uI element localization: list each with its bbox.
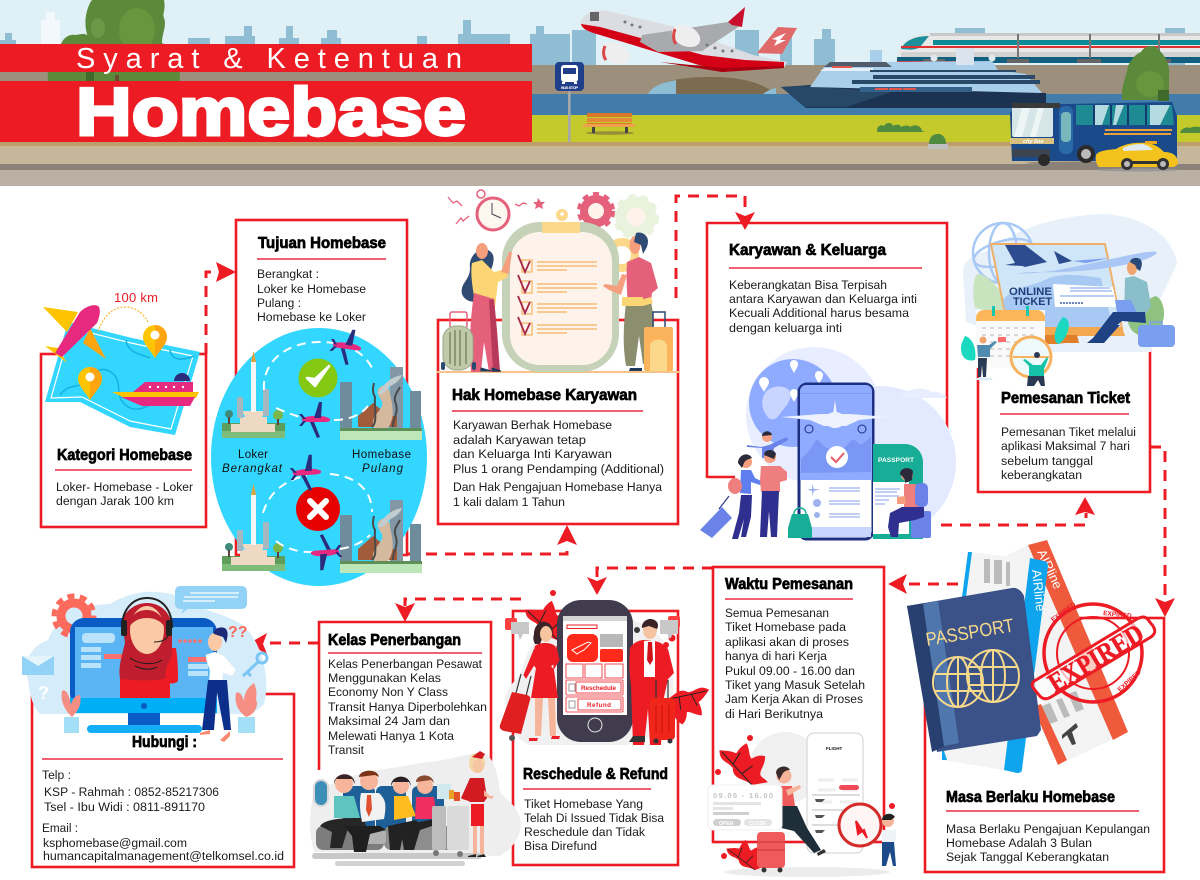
online ticket label: TICKET	[1013, 296, 1052, 308]
title line 1: Syarat & Ketentuan	[76, 43, 462, 75]
arrow: masa to waktu	[888, 574, 958, 594]
contact details: ksphomebase@gmail.com	[43, 836, 187, 850]
body text: Keberangkatan Bisa Terpisah	[729, 278, 887, 292]
phone	[781, 384, 889, 539]
panel: masa berlaku homebase	[907, 540, 1164, 872]
plane	[581, 7, 797, 72]
icon: monas top	[222, 351, 285, 438]
speech bubble	[175, 586, 247, 614]
panel: kategori homebase	[41, 290, 206, 527]
illustration: family with phone	[700, 347, 956, 539]
expired stamp: EXPIRED	[1103, 610, 1132, 620]
illustration: passport and tickets	[907, 540, 1155, 773]
body text: keberangkatan	[1001, 468, 1082, 482]
body text: Tiket Homebase pada	[725, 620, 846, 634]
body text: Semua Pemesanan	[725, 606, 829, 620]
contact details: Telp :	[42, 768, 71, 782]
body text: aplikasi Maksimal 7 hari	[1001, 439, 1130, 453]
passport: PASSPORT	[924, 615, 1016, 651]
time card: 09.05 - 16.00	[713, 791, 773, 800]
plane	[43, 305, 106, 363]
body text: Reschedule dan Tidak	[524, 825, 646, 839]
body text	[946, 822, 1150, 864]
icon: plane 4	[310, 533, 343, 571]
icon: check	[298, 358, 338, 398]
body text: Melewati Hanya 1 Kota	[328, 729, 454, 743]
body text: Berangkat :	[257, 267, 319, 281]
drink cart	[432, 784, 469, 857]
orange ticket: AIRline	[1034, 547, 1066, 591]
cruise ship	[781, 48, 1046, 108]
seats	[316, 786, 454, 850]
father with child	[747, 431, 788, 537]
icon: map with plane and ship	[43, 305, 200, 435]
heading: Waktu Pemesanan	[725, 576, 853, 593]
phone	[557, 600, 633, 742]
contact details: Tsel - Ibu Widi : 0811-891170	[44, 800, 205, 814]
time card: CLOSE	[749, 821, 767, 827]
button label: Reschedule	[581, 685, 616, 692]
passport	[873, 444, 923, 539]
panel: tujuan homebase	[211, 220, 427, 586]
label: homebase: Pulang	[362, 463, 404, 475]
bushes	[877, 123, 1200, 149]
icon: suroboyo top	[340, 367, 422, 440]
teal leaves	[961, 317, 1069, 360]
expired stamp: EXPIRED	[1117, 669, 1143, 693]
icon: suroboyo bottom	[340, 500, 422, 573]
body text: Loker- Homebase - Loker	[56, 480, 193, 494]
man at clock	[1023, 352, 1048, 386]
question mark: ?	[38, 683, 49, 703]
distance label: 100 km	[114, 290, 158, 305]
body text: Transit	[328, 743, 365, 757]
blue ticket	[942, 552, 1048, 773]
panel: reschedule dan refund	[500, 590, 711, 865]
illustration: reschedule app with couple	[500, 590, 711, 745]
route diagram circle	[211, 327, 427, 586]
illustration: online ticket	[961, 214, 1177, 386]
body text	[524, 797, 664, 853]
illustration: customer service	[22, 586, 267, 742]
gears	[579, 194, 657, 268]
title line 2: Homebase	[76, 74, 466, 150]
expired stamp: EXPIRED	[1043, 618, 1149, 698]
bus stop sign: BUS STOP	[561, 85, 578, 90]
plane	[1005, 245, 1157, 274]
red leaves	[524, 597, 577, 648]
seated man with laptop	[1087, 258, 1175, 347]
man	[629, 619, 674, 745]
passport	[907, 588, 1041, 752]
label: homebase	[352, 449, 411, 475]
panel: hak homebase karyawan	[436, 190, 680, 524]
contact details: KSP - Rahmah : 0852-85217306	[44, 785, 219, 799]
bench	[583, 113, 635, 135]
heading: Pemesanan Ticket	[1001, 390, 1130, 407]
heading: Reschedule & Refund	[523, 766, 668, 783]
man	[603, 232, 658, 371]
body text: Homebase ke Loker	[257, 310, 366, 324]
man at calendar	[975, 336, 997, 380]
woman operator	[119, 598, 178, 698]
clock	[1011, 337, 1051, 377]
panel: hubungi	[22, 586, 294, 867]
body text: Bisa Direfund	[524, 839, 597, 853]
plant left	[62, 690, 81, 733]
train	[897, 33, 1200, 63]
body text: dengan Jarak 100 km	[56, 494, 174, 508]
illustration: clipboard with travellers	[436, 190, 680, 372]
online ticket label	[1009, 286, 1052, 308]
body text	[453, 418, 664, 509]
taxi	[1096, 141, 1178, 172]
flow arrows	[206, 196, 1175, 654]
coach bus: city line	[1023, 139, 1043, 145]
passport: PASSPORT	[878, 457, 914, 464]
contact details	[42, 768, 284, 863]
orange suitcase	[644, 312, 673, 371]
heading: Masa Berlaku Homebase	[946, 789, 1115, 806]
arrow: hak to karyawan	[676, 196, 755, 298]
plant right	[235, 683, 257, 733]
icon: monas bottom	[222, 484, 285, 571]
body text: Loker ke Homebase	[257, 282, 366, 296]
label: homebase: Homebase	[352, 449, 411, 461]
body text	[725, 606, 865, 721]
body text	[729, 278, 917, 335]
green bag	[788, 508, 812, 538]
calendar	[976, 306, 1045, 368]
arrow: karyawan to pemesanan	[941, 497, 1095, 525]
body text: Homebase Adalah 3 Bulan	[946, 836, 1092, 850]
heading: Karyawan & Keluarga	[729, 242, 886, 259]
question marks: ??	[228, 624, 248, 641]
icon: plane 2	[299, 402, 330, 438]
blue ticket: AIRline	[1029, 569, 1048, 612]
body text: Pemesanan Tiket melalui	[1001, 425, 1136, 439]
booking phone	[807, 733, 863, 853]
gear	[54, 596, 94, 636]
body text: Pulang :	[257, 296, 301, 310]
map pins	[759, 360, 823, 402]
panel: karyawan dan keluarga	[700, 223, 956, 539]
ticket	[1053, 284, 1117, 307]
icon: envelope	[22, 656, 54, 675]
label: loker	[222, 449, 283, 475]
woman	[524, 622, 560, 741]
header scene: transport skyline	[0, 0, 1200, 186]
illustration: cabin with passengers	[310, 751, 521, 866]
body text: hanya di hari Kerja	[725, 649, 827, 663]
woman with suitcase	[700, 454, 763, 539]
icon: cross	[296, 487, 340, 531]
passenger 1	[320, 774, 366, 848]
icon: plane 1	[328, 327, 364, 367]
heading: Tujuan Homebase	[258, 235, 386, 252]
illustration: booking app with traveller	[708, 732, 896, 877]
arrow: reschedule to kelas	[395, 599, 521, 622]
time card	[708, 785, 782, 830]
body text: Menggunakan Kelas	[328, 671, 441, 685]
city skyline	[0, 20, 1185, 66]
body text	[328, 657, 487, 757]
body text: Tiket yang Masuk Setelah	[725, 678, 865, 692]
alarm clock	[839, 804, 881, 846]
heading: Kelas Penerbangan	[328, 632, 461, 649]
arrow: kelas to hubungi	[248, 633, 319, 654]
monitor	[991, 244, 1125, 344]
panel: pemesanan ticket	[961, 214, 1177, 492]
right suitcase	[650, 680, 675, 744]
ship	[112, 373, 199, 406]
arrow: waktu to reschedule	[587, 568, 713, 595]
passenger 3	[388, 777, 420, 850]
body text: dengan keluarga inti	[729, 321, 842, 335]
button label: Refund	[587, 702, 611, 709]
heading: Kategori Homebase	[57, 447, 192, 464]
bus stop sign	[555, 62, 584, 142]
left suitcase	[500, 674, 531, 741]
left tree	[48, 0, 180, 83]
body text: Telah Di Issued Tidak Bisa	[524, 811, 664, 825]
body text: Dan Hak Pengajuan Homebase Hanya	[453, 480, 662, 494]
body text	[257, 267, 366, 324]
panel: kelas penerbangan	[310, 622, 521, 866]
contact details: Email :	[42, 821, 78, 835]
body text: dan Keluarga Inti Karyawan	[453, 447, 612, 461]
body text: Plus 1 orang Pendamping (Additional)	[453, 462, 664, 476]
map pin	[143, 325, 167, 358]
body text: Maksimal 24 Jam dan	[328, 714, 450, 728]
body text: aplikasi akan di proses	[725, 635, 849, 649]
online ticket label: ONLINE	[1009, 286, 1052, 298]
monitor	[70, 618, 217, 733]
flight attendant	[461, 751, 494, 857]
body text: Jam Kerja Akan di Proses	[725, 692, 863, 706]
expired stamp: EXPIRED	[1050, 601, 1078, 624]
heading: Hak Homebase Karyawan	[452, 387, 637, 404]
seated man	[888, 468, 931, 538]
time card: OPEN	[719, 821, 734, 827]
orange ticket	[1007, 540, 1128, 765]
red suitcase	[757, 832, 785, 872]
right tree	[1122, 46, 1169, 101]
arrow: tujuan to hak	[407, 525, 577, 554]
heading: Hubungi :	[132, 734, 197, 751]
body text: Economy Non Y Class	[328, 685, 448, 699]
body text: 1 kali dalam 1 Tahun	[453, 495, 565, 509]
body text: Karyawan Berhak Homebase	[453, 418, 612, 432]
passenger 4	[400, 775, 438, 850]
booking phone: FLIGHT	[826, 746, 842, 751]
body text: Transit Hanya Diperbolehkan	[328, 700, 487, 714]
green suitcase	[441, 312, 476, 370]
label: loker: Loker	[238, 449, 268, 461]
body text: Sejak Tanggal Keberangkatan	[946, 850, 1109, 864]
arrow: kategori to tujuan	[206, 262, 236, 354]
icon: plane 3	[289, 454, 322, 492]
body text: Kecuali Additional harus besama	[729, 306, 909, 320]
traveller	[774, 766, 826, 856]
body text	[56, 480, 193, 508]
map pin	[78, 367, 102, 400]
body text: sebelum tanggal	[1001, 454, 1093, 468]
body text: antara Karyawan dan Keluarga inti	[729, 292, 917, 306]
contact details: humancapitalmanagement@telkomsel.co.id	[43, 849, 284, 863]
small man	[882, 814, 896, 866]
label: loker: Berangkat	[222, 463, 283, 475]
arrow: pemesanan to masa	[1150, 447, 1175, 617]
body text: Kelas Penerbangan Pesawat	[328, 657, 483, 671]
man on phone	[200, 627, 236, 742]
coach bus	[1010, 102, 1177, 166]
body text: Pukul 09.00 - 16.00 dan	[725, 664, 855, 678]
title banner	[0, 43, 532, 150]
body text: di Hari Berikutnya	[725, 707, 823, 721]
icon: key	[243, 653, 267, 676]
body text: Masa Berlaku Pengajuan Kepulangan	[946, 822, 1150, 836]
panel: waktu pemesanan	[708, 567, 896, 877]
body text	[1001, 425, 1136, 482]
clock	[477, 190, 509, 230]
body text: Tiket Homebase Yang	[524, 797, 643, 811]
red leaves	[719, 741, 770, 790]
passenger 2	[344, 771, 386, 852]
body text: adalah Karyawan tetap	[453, 433, 586, 447]
woman	[462, 243, 512, 372]
